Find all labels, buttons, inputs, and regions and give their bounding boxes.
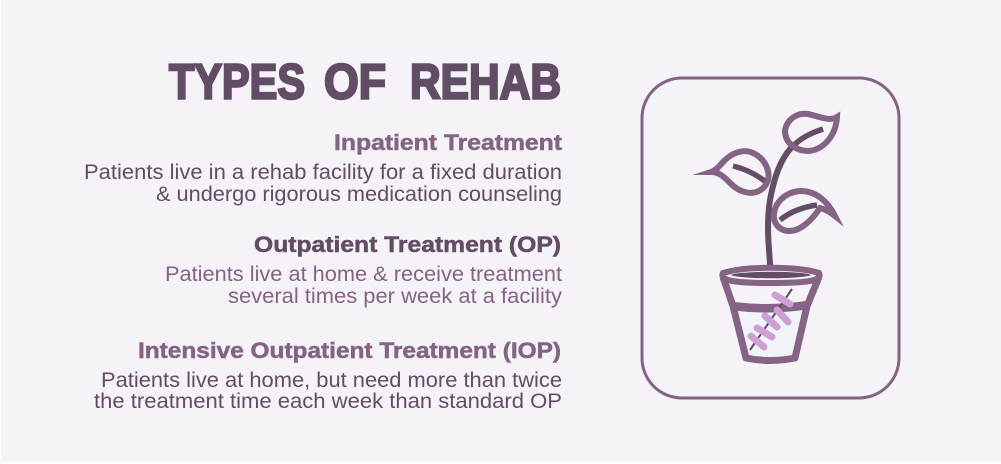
- title: [169, 56, 561, 110]
- pot rim: [722, 268, 820, 283]
- heading: inpatient treatment: Inpatient Treatment: [334, 130, 563, 155]
- description: intensive outpatient treatment: the treatment time each week than standard OP: [94, 390, 562, 413]
- pot: [722, 268, 820, 360]
- heading: intensive outpatient treatment: Intensive Outpatient Treatment (IOP): [138, 338, 561, 363]
- description: inpatient treatment: Patients live in a rehab facility for a fixed duration: [84, 161, 562, 184]
- panel: plant icon frame: [642, 78, 899, 398]
- title: OF: [324, 56, 386, 110]
- icon: potted plant with stitched pot: [711, 114, 837, 360]
- leaves: [711, 114, 837, 231]
- stem: [768, 148, 791, 275]
- description: intensive outpatient treatment: Patients live at home, but need more than twice: [101, 369, 562, 392]
- description: outpatient treatment: Patients live at home & receive treatment: [165, 263, 562, 286]
- section: intensive outpatient treatment: [94, 338, 562, 413]
- section: inpatient treatment: [84, 130, 563, 206]
- description: outpatient treatment: [165, 263, 563, 308]
- stitches: [750, 289, 792, 350]
- title: REHAB: [410, 56, 561, 110]
- description: outpatient treatment: several times per week at a facility: [228, 285, 563, 308]
- leaf veins: [733, 129, 823, 220]
- heading: outpatient treatment: Outpatient Treatment (OP): [254, 232, 561, 257]
- pot body: [723, 277, 819, 360]
- description: inpatient treatment: & undergo rigorous medication counseling: [156, 183, 562, 206]
- pot water fill: [740, 310, 803, 358]
- description: inpatient treatment: [84, 161, 562, 206]
- title: TYPES: [169, 56, 305, 110]
- soil: [730, 271, 812, 279]
- section: outpatient treatment: [165, 232, 563, 308]
- description: intensive outpatient treatment: [94, 369, 562, 413]
